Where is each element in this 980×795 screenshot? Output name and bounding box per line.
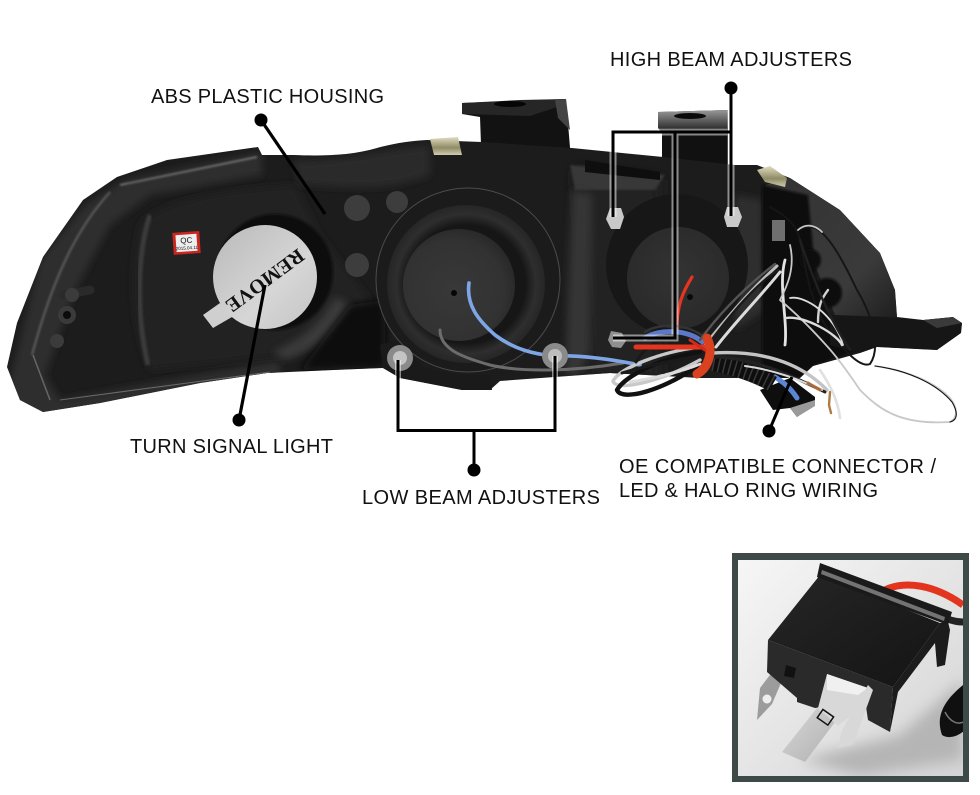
low beam lens assembly xyxy=(376,188,560,390)
white harness strands xyxy=(782,260,786,345)
bottom blade xyxy=(782,708,835,762)
high beam lens assembly xyxy=(606,194,748,336)
callout: turn signal light: TURN SIGNAL LIGHT xyxy=(130,436,333,458)
relay shadow xyxy=(800,680,963,776)
left terminal xyxy=(757,674,780,720)
inset frame xyxy=(732,553,969,782)
loom end xyxy=(940,685,965,737)
callout: turn signal light xyxy=(130,285,333,458)
corrugated loom xyxy=(713,363,773,384)
callout: connector and wiring xyxy=(619,377,936,502)
callout: high beam adjusters: HIGH BEAM ADJUSTERS xyxy=(610,49,852,71)
QC label: QC xyxy=(180,236,193,245)
callout: low beam adjusters xyxy=(362,356,600,509)
QC label: 2015.04.11 xyxy=(176,245,199,251)
black rising wire xyxy=(770,207,875,365)
red wire xyxy=(885,585,963,605)
callout: ABS plastic housing xyxy=(151,86,384,214)
housing shading xyxy=(0,145,962,420)
QC label xyxy=(172,231,201,255)
callout: connector and wiring: OE COMPATIBLE CONNECTOR / xyxy=(619,456,936,478)
harness loops xyxy=(613,347,700,385)
callout: connector and wiring: LED & HALO RING WIRING xyxy=(619,480,878,502)
callout: ABS plastic housing: ABS PLASTIC HOUSING xyxy=(151,86,384,108)
relay front face xyxy=(767,640,893,732)
connector block xyxy=(760,378,815,417)
housing body xyxy=(7,140,962,412)
turn signal socket with REMOVE sticker xyxy=(203,214,333,330)
inset photo: relay connector xyxy=(732,553,969,782)
turn signal socket with REMOVE sticker: REMOVE xyxy=(221,244,308,316)
left mounting pins xyxy=(50,288,90,348)
mounting bracket: left xyxy=(462,99,572,172)
headlight assembly photo xyxy=(0,99,962,422)
adjuster screws xyxy=(387,207,742,371)
socket wires xyxy=(440,277,705,370)
relay side xyxy=(890,622,950,732)
relay lip xyxy=(817,563,952,625)
housing plugs xyxy=(344,191,408,277)
red tie xyxy=(636,344,707,350)
mounting bracket: right xyxy=(658,110,728,205)
shiny center xyxy=(818,674,868,726)
upper wire bundle xyxy=(700,264,775,340)
side terminal xyxy=(842,685,873,747)
relay top xyxy=(768,575,940,687)
callout: high beam adjusters xyxy=(610,49,852,338)
callout: low beam adjusters: LOW BEAM ADJUSTERS xyxy=(362,487,600,509)
metal clips xyxy=(430,137,787,187)
harness connector plug xyxy=(772,220,785,241)
wiring harness xyxy=(613,207,956,422)
